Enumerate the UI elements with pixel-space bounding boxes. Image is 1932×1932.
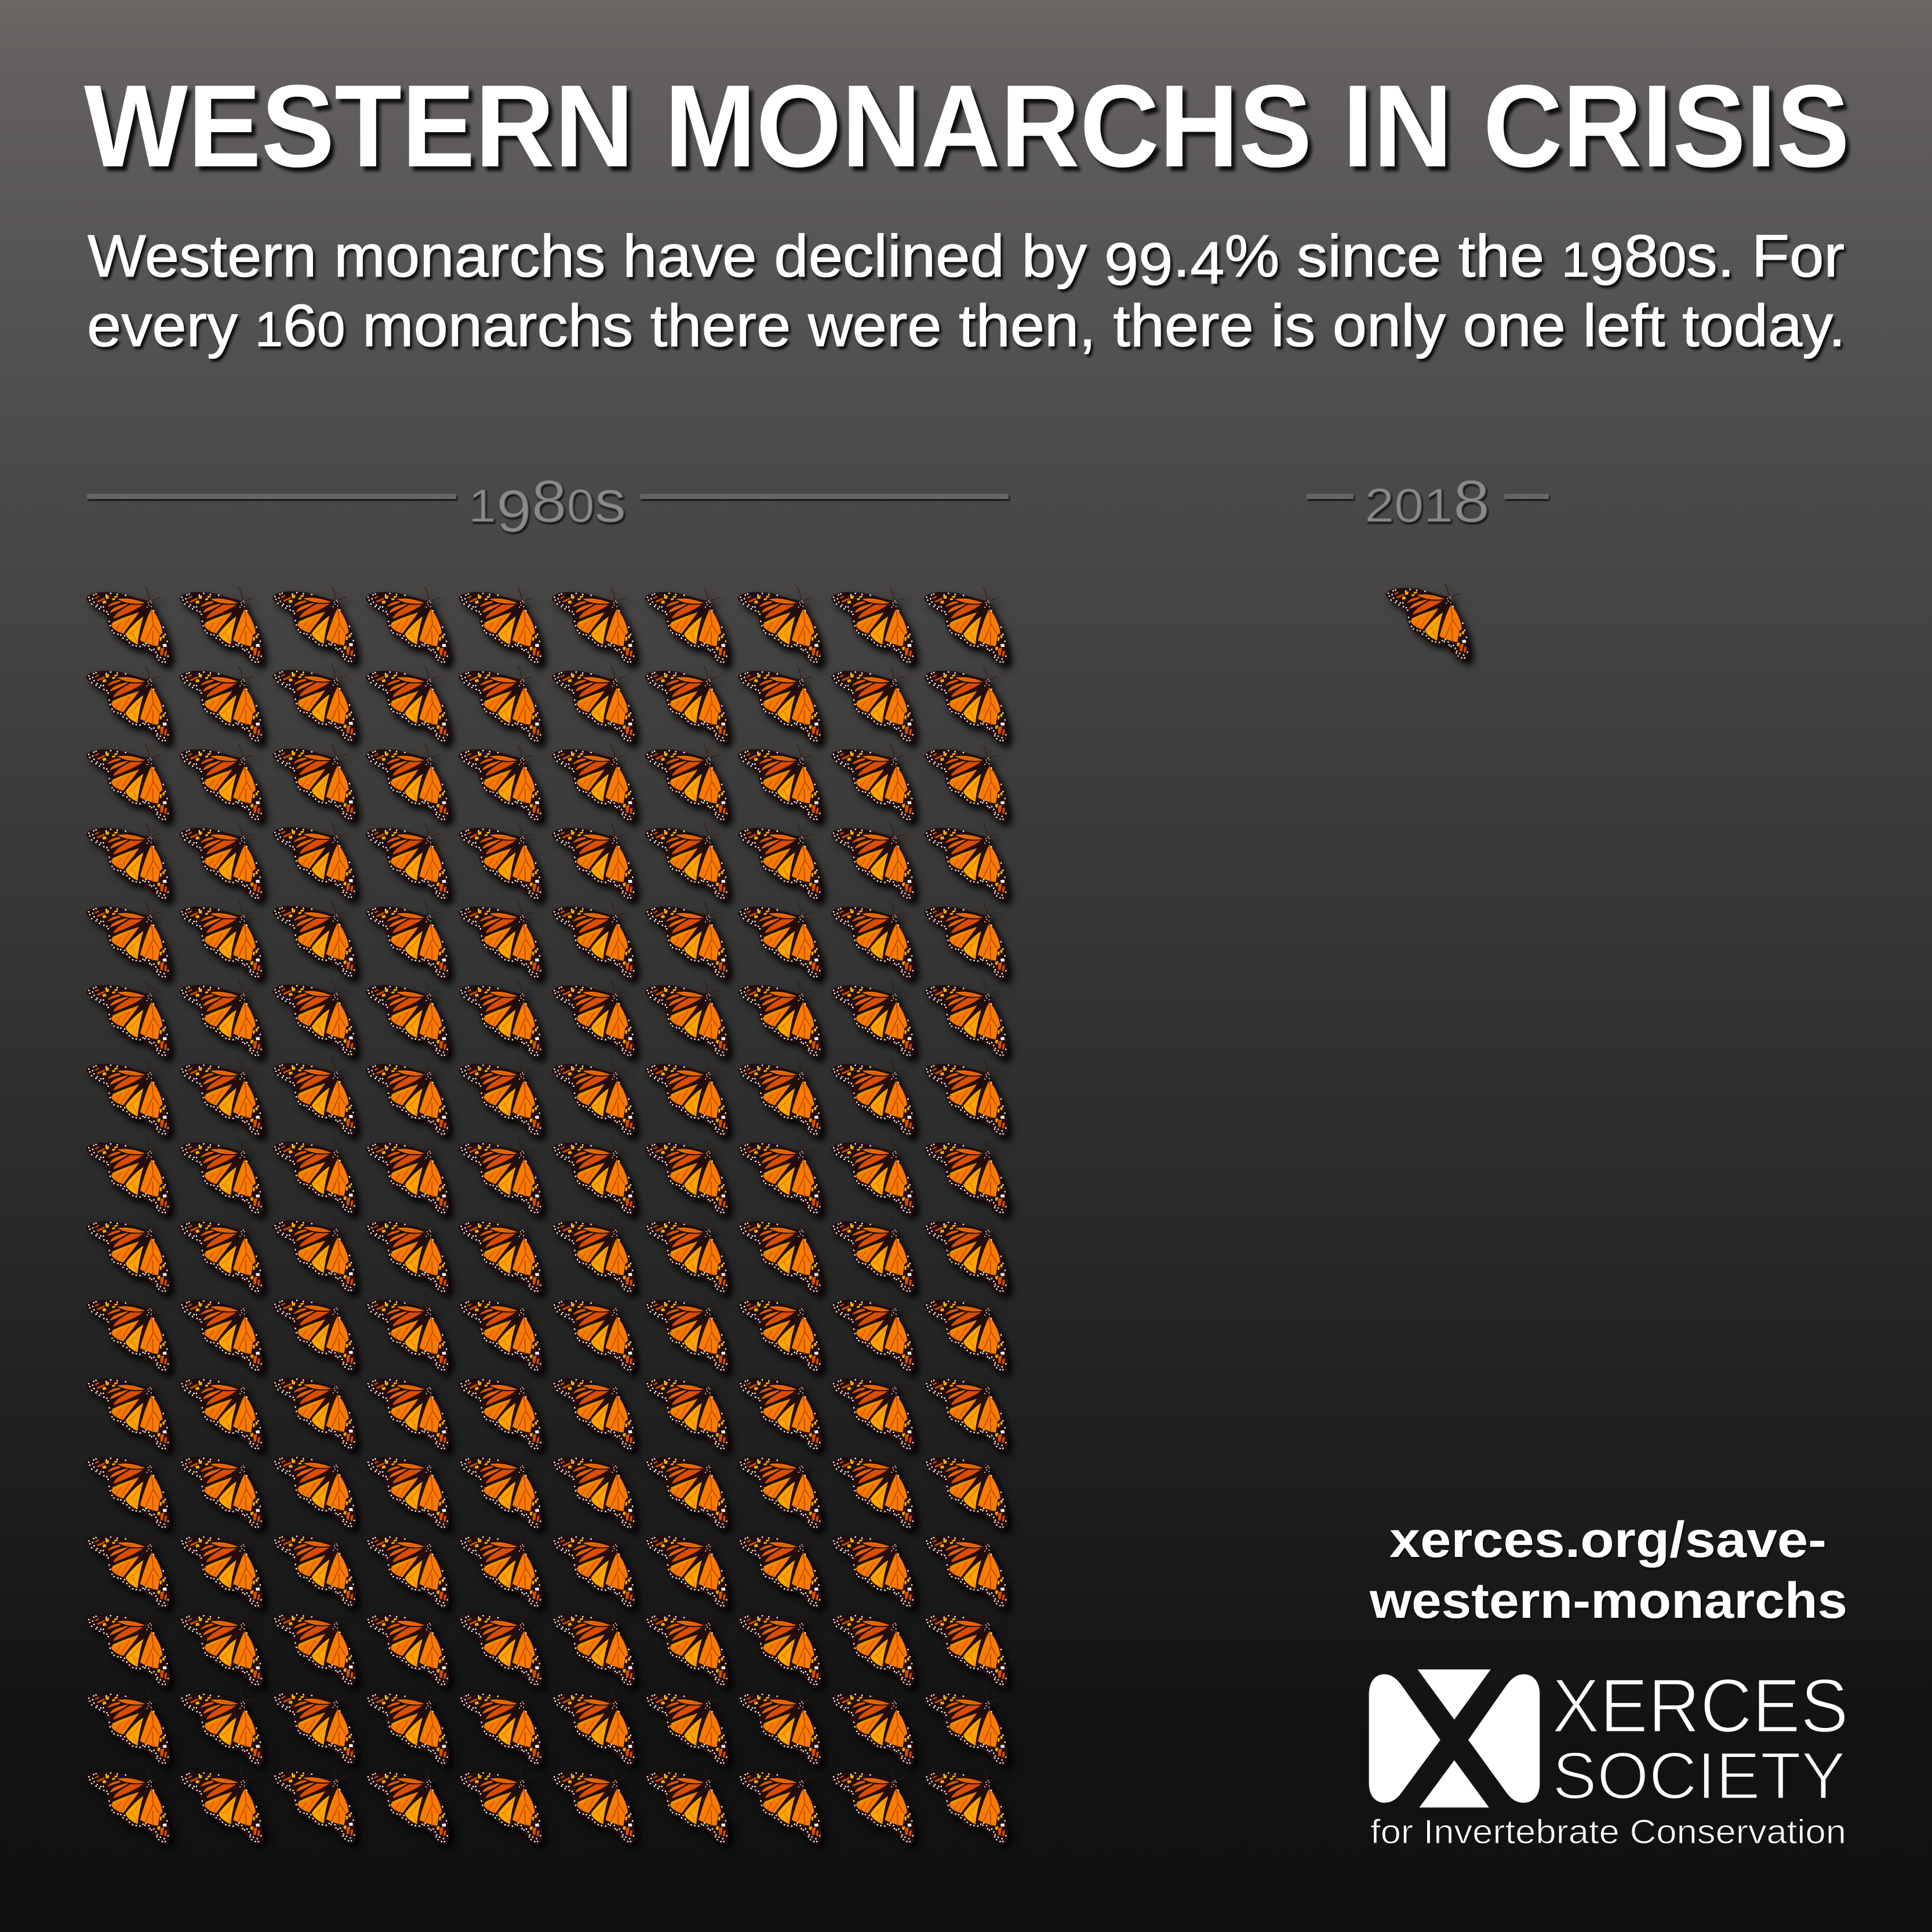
logo wordmark: for Invertebrate Conservation xyxy=(1370,1813,1846,1851)
url text: xerces.org/save- xyxy=(1389,1512,1827,1568)
logo wordmark: SOCIETY xyxy=(1552,1739,1846,1813)
header: 1980s xyxy=(87,468,1009,544)
logo wordmark: XERCES xyxy=(1552,1663,1849,1748)
subtitle text block: since the 1 xyxy=(1296,223,1588,289)
header: 1980s: 1 xyxy=(468,480,496,532)
header: 2018: 2018 xyxy=(1365,468,1490,534)
url text: western-monarchs xyxy=(1369,1573,1847,1629)
subtitle text block: 99 xyxy=(1104,231,1173,297)
header: 1980s: 9 xyxy=(496,478,532,544)
single butterfly: 2018 xyxy=(1387,583,1469,660)
logo mark xyxy=(1369,1669,1540,1807)
butterfly grid: 1980s, 160 monarchs xyxy=(87,583,1469,1844)
header: 1980s: 8 xyxy=(532,468,566,534)
logo wordmark xyxy=(1370,1663,1849,1851)
subtitle text block: 9 xyxy=(1589,231,1624,297)
subtitle text block: Western monarchs have declined by xyxy=(88,223,1052,289)
subtitle text block: . xyxy=(1173,223,1190,289)
subtitle text block: every 160 monarchs there were then, there is only one left today. xyxy=(87,292,1846,359)
subtitle text block: % xyxy=(1224,223,1279,289)
subtitle text block: 4 xyxy=(1190,230,1224,296)
url text xyxy=(1369,1512,1847,1629)
subtitle text block: 8 xyxy=(1624,223,1658,289)
logo: Xerces Society xyxy=(1369,1663,1849,1851)
title: WESTERN MONARCHS IN CRISIS xyxy=(84,60,1850,191)
subtitle text block: 0s. For xyxy=(1658,223,1839,289)
header: 2018 xyxy=(1307,468,1549,534)
subtitle text block xyxy=(87,223,1846,359)
header: 1980s: 0s xyxy=(566,468,624,534)
